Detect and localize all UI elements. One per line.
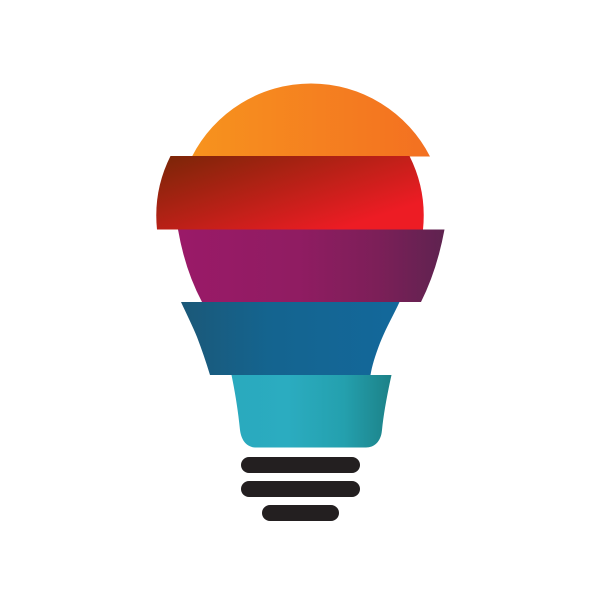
bulb segment: purple band bbox=[178, 230, 444, 302]
bulb segment: orange dome bbox=[192, 84, 430, 156]
screw thread: middle bar bbox=[241, 481, 360, 497]
bulb segment: teal base bbox=[232, 375, 392, 448]
bulb segment: blue band bbox=[181, 302, 400, 375]
screw thread: bottom bar bbox=[262, 505, 339, 521]
bulb segment: red band bbox=[156, 156, 424, 230]
screw thread: top bar bbox=[241, 457, 360, 473]
